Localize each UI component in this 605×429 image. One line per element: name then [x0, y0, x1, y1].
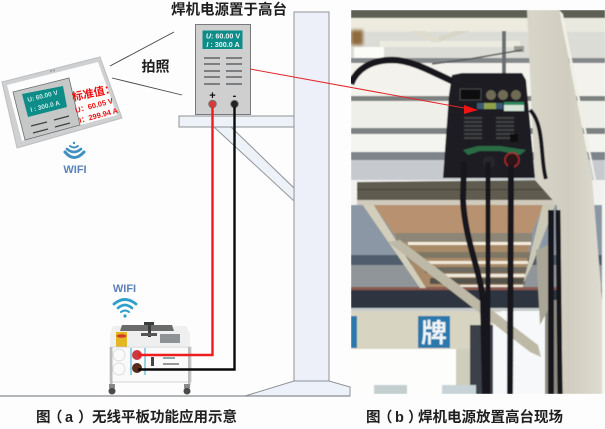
- caption b: ）: [408, 409, 422, 426]
- tablet reading in red: I：299.94 A: [78, 106, 119, 125]
- display: [202, 30, 242, 49]
- label: wifi under tablet: WIFI: [63, 164, 87, 176]
- caption b: （: [378, 409, 392, 426]
- tablet photo of power supply: I : 300.0 A: [30, 100, 61, 114]
- welding power supply unit: [443, 73, 535, 178]
- label: take a photo: 拍照: [142, 58, 170, 74]
- roof stripes: [351, 10, 605, 205]
- small cabinets at the wall bottom: [374, 385, 476, 394]
- platform top slab: [357, 180, 557, 205]
- panel: site photo of welding power supply on raised platform: [351, 10, 605, 394]
- caption a: a: [65, 410, 74, 426]
- blue sign: [351, 316, 450, 348]
- pillar diagram: [245, 12, 350, 396]
- tablet reading in red: 标准值：: [71, 81, 117, 104]
- caption a: 无线平板功能应用示意: [92, 408, 237, 426]
- tablet photo of power supply: [13, 78, 80, 140]
- ground line: [0, 395, 350, 397]
- terminals: [209, 100, 238, 108]
- icon: wifi above test unit: [114, 300, 136, 318]
- background wall below the platform: [351, 200, 605, 394]
- tablet photo of power supply: U: 60.00 V: [27, 89, 59, 104]
- tablet reading in red: U：60.05 V: [74, 96, 114, 115]
- blue sign: 牌: [421, 318, 447, 348]
- caption a: （: [48, 409, 62, 426]
- display: I : 300.0 A: [206, 40, 240, 49]
- vent slots: [204, 58, 242, 84]
- platform and diagonal brace: [179, 116, 294, 201]
- polarity labels: [209, 90, 237, 102]
- platform frame and diagonal brace: [362, 203, 556, 357]
- roof beam and struts: [351, 27, 524, 74]
- label: wifi above test unit: WIFI: [113, 283, 136, 295]
- caption a: ）: [78, 409, 92, 426]
- black cable: [138, 107, 234, 370]
- platform wood underside: [373, 204, 544, 287]
- test equipment cart: [108, 322, 191, 394]
- display: U: 60.00 V: [206, 32, 240, 40]
- caption a: 图: [36, 409, 50, 426]
- polarity labels: +: [209, 90, 216, 102]
- tablet: [2, 57, 122, 148]
- caption b: b: [395, 410, 404, 426]
- caption b: 图: [366, 409, 380, 426]
- tablet reading in red: [71, 81, 119, 125]
- red cable: [138, 107, 212, 355]
- heading: power supply on high platform: 焊机电源置于高台: [171, 0, 287, 18]
- polarity labels: -: [233, 90, 237, 102]
- icon: wifi under tablet: [65, 142, 84, 158]
- sight lines for photographing: [110, 32, 182, 95]
- red arrow from power supply to photo: [250, 69, 478, 114]
- caption b: 焊机电源放置高台现场: [418, 408, 563, 426]
- cables: [351, 50, 560, 394]
- concrete column: [527, 10, 602, 394]
- power supply unit: [196, 24, 250, 114]
